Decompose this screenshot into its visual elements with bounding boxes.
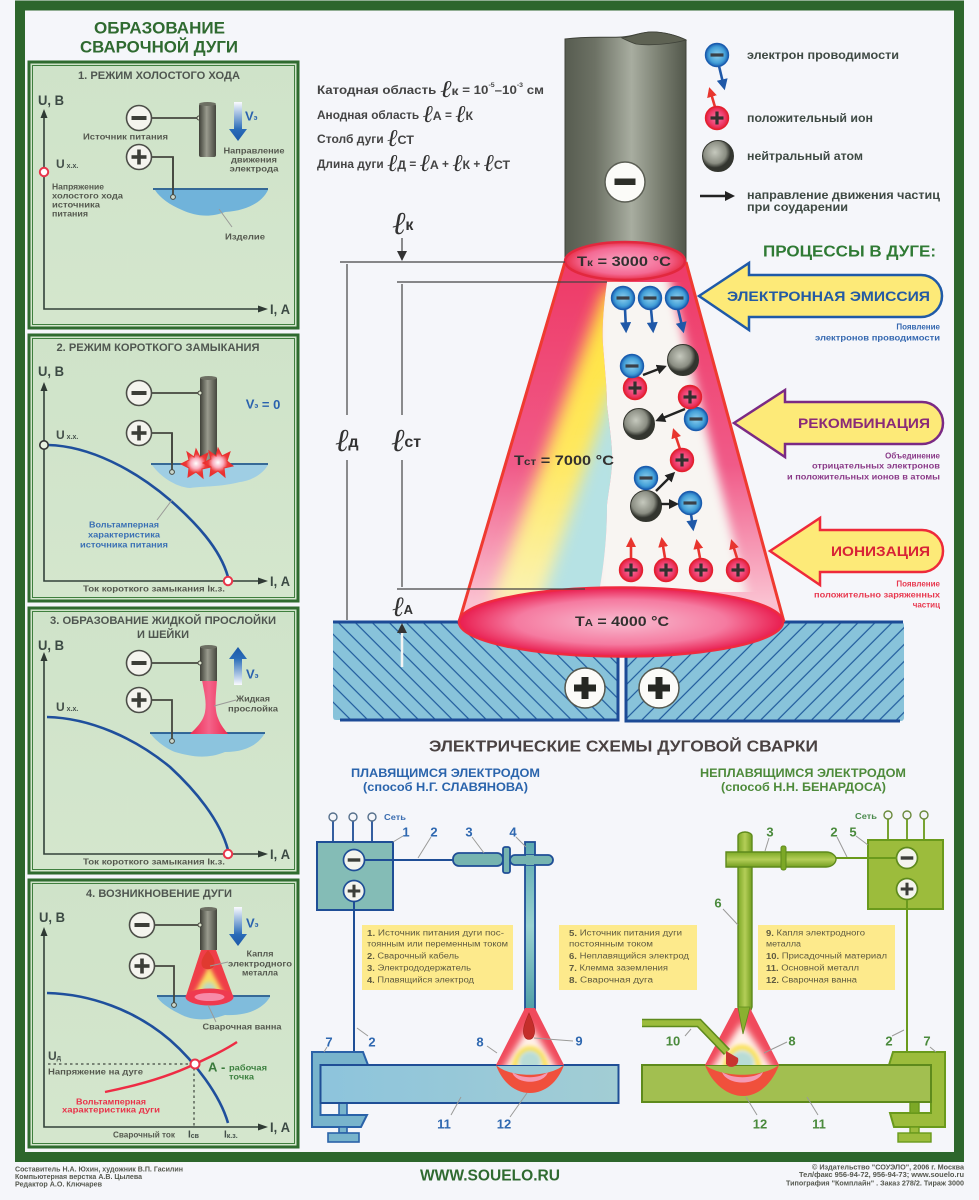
volt-ampere curve: panel 3: Ток короткого замыкания Iк.з. xyxy=(83,858,225,866)
caption: ionization: частиц xyxy=(913,600,940,610)
dimension label: arc length: д xyxy=(348,434,358,450)
welding current label xyxy=(113,1130,238,1140)
negative sign on electrode xyxy=(605,162,645,202)
caption: emission: Появление xyxy=(896,322,941,332)
footer: website: WWW.SOUELO.RU xyxy=(420,1168,560,1184)
label: liquid layer xyxy=(214,694,279,714)
legend box 2: 5. Источник питания дуги xyxy=(569,928,682,938)
open-circuit voltage point xyxy=(40,157,124,218)
workpiece xyxy=(153,157,268,242)
arrow: electrode feed panel 4: э xyxy=(255,922,259,928)
dimension label: anode length: А xyxy=(404,602,414,616)
volt-ampere curve: panel 2: Ток короткого замыкания Iк.з. xyxy=(83,584,225,594)
numbered leaders right: 2 xyxy=(885,1034,893,1048)
formulas: К xyxy=(463,158,471,172)
filler wire xyxy=(642,1023,738,1067)
footer: publisher xyxy=(786,1164,964,1188)
axes: panel 3: I, А xyxy=(270,846,290,862)
open-circuit voltage point: источника xyxy=(52,200,101,210)
power source box left xyxy=(317,812,406,910)
plus terminal left xyxy=(565,668,605,708)
legend xyxy=(700,44,941,214)
workpiece and clamp left xyxy=(312,1052,618,1142)
arrow: electrode feed panel 4: V xyxy=(246,916,255,930)
numbered leaders right: 6 xyxy=(714,896,722,910)
panel 1: open circuit mode xyxy=(29,62,298,328)
cables right xyxy=(835,858,907,1053)
labels: droplet and weld pool: Сварочная ванна xyxy=(202,1022,282,1032)
arc right xyxy=(705,1006,779,1096)
welding current label: I xyxy=(224,1130,227,1140)
open-circuit voltage point: х.х. xyxy=(67,162,78,170)
formulas: ℓ xyxy=(420,151,430,177)
electrode with arc and droplet xyxy=(186,907,234,1006)
footer: publisher: © Издательство "СОУЭЛО", 2006 г. Москва xyxy=(812,1164,964,1172)
legend box 1: 3. Электрододержатель xyxy=(367,964,471,972)
caption: ionization xyxy=(814,580,941,610)
operating point A: Напряжение на дуге xyxy=(48,1068,144,1076)
formulas: –10 xyxy=(495,85,517,97)
workpiece: Изделие xyxy=(225,232,266,242)
panel 4: arc ignition xyxy=(29,880,298,1147)
subheading: consumable electrode: (способ Н.Г. СЛАВЯНОВА) xyxy=(363,780,528,794)
open-circuit voltage point: холостого хода xyxy=(52,192,124,200)
volt-ampere curve: panel 2: Вольтамперная xyxy=(89,520,159,530)
right circuit diagram xyxy=(642,811,945,1142)
subheading: consumable electrode: ПЛАВЯЩИМСЯ ЭЛЕКТРОДОМ xyxy=(351,766,540,780)
heading: welding circuits: ЭЛЕКТРИЧЕСКИЕ СХЕМЫ ДУГОВОЙ СВАРКИ xyxy=(429,738,818,756)
numbered leaders left: 4 xyxy=(509,824,517,840)
numbered leaders right: 11 xyxy=(812,1116,826,1132)
power source box right: Сеть xyxy=(855,811,877,821)
terminals and electrode: panel 2 xyxy=(126,376,280,472)
volt-ampere curve: panel 3: U xyxy=(56,700,65,714)
legend box 1: 1. Источник питания дуги пос- xyxy=(367,928,504,938)
heading: panel 3 xyxy=(50,614,276,641)
legend: electron: электрон проводимости xyxy=(747,48,899,62)
subheading: non-consumable electrode: (способ Н.Н. БЕНАРДОСА) xyxy=(721,780,886,794)
title xyxy=(80,18,238,56)
formulas: Д xyxy=(397,158,407,172)
title: СВАРОЧНОЙ ДУГИ xyxy=(80,38,238,56)
formulas: СТ xyxy=(494,158,511,172)
panel 3: liquid layer and neck xyxy=(29,608,298,873)
arc curve caption: характеристика дуги xyxy=(62,1106,160,1114)
anode spot: Т xyxy=(575,613,584,629)
axes: panel 2 xyxy=(38,363,290,589)
formulas xyxy=(317,77,544,177)
anode spot: А xyxy=(585,618,593,628)
caption: emission xyxy=(815,322,941,342)
axes: panel 2: I, А xyxy=(270,573,290,589)
heading: panel 4: 4. ВОЗНИКНОВЕНИЕ ДУГИ xyxy=(86,888,232,900)
labels: droplet and weld pool: металла xyxy=(242,968,279,978)
formulas: ℓ xyxy=(484,151,494,177)
formulas: ℓ xyxy=(387,151,397,177)
volt-ampere curve: panel 2 xyxy=(40,428,232,594)
power source terminals xyxy=(83,106,201,197)
formulas: Анодная область xyxy=(317,110,416,122)
formulas: см xyxy=(523,85,544,97)
axes: panel 1: I, А xyxy=(270,301,290,317)
positive ions row xyxy=(620,540,750,582)
emission electrons xyxy=(612,286,688,330)
dimension label: column length: ст xyxy=(404,434,421,450)
title: ОБРАЗОВАНИЕ xyxy=(94,18,225,38)
terminals and electrode: panel 2: = 0 xyxy=(258,396,280,412)
legend box 3: 11. Основной металл xyxy=(766,964,859,972)
workpiece: panel 3 xyxy=(150,733,265,757)
arrow: electrode retracts xyxy=(229,647,259,685)
heading: panel 3: 3. ОБРАЗОВАНИЕ ЖИДКОЙ ПРОСЛОЙКИ xyxy=(50,614,276,627)
operating point A: д xyxy=(57,1054,62,1062)
formulas: = 10 xyxy=(462,85,484,97)
caption: emission: электронов проводимости xyxy=(815,334,940,342)
axes: panel 3: U, В xyxy=(38,637,64,653)
arrow: electrode feed: э xyxy=(254,114,258,122)
legend box 1: 4. Плавящийся электрод xyxy=(367,976,474,984)
panel 2: short circuit mode xyxy=(29,335,298,601)
formulas: = xyxy=(445,110,452,122)
open-circuit voltage point: Напряжение xyxy=(52,182,105,192)
footer: publisher: Типография "Комплайн" . Заказ 278/2. Тираж 3000 xyxy=(786,1180,964,1188)
cables left xyxy=(354,860,454,1053)
numbered leaders left: 11 xyxy=(437,1116,451,1132)
arc left xyxy=(496,1008,564,1093)
operating point A: U xyxy=(48,1049,57,1063)
column temperature: Т xyxy=(514,452,523,468)
operating point A xyxy=(48,1049,267,1127)
label: liquid layer: Жидкая xyxy=(235,694,270,704)
arrow: electrode feed: электрода xyxy=(230,164,279,174)
heading: panel 2: 2. РЕЖИМ КОРОТКОГО ЗАМЫКАНИЯ xyxy=(56,342,260,354)
volt-ampere curve: panel 2: источника питания xyxy=(80,540,168,550)
plus terminal right xyxy=(639,668,679,708)
power source box right xyxy=(855,811,943,909)
formulas: Катодная область xyxy=(317,85,420,97)
axes: panel 4: U, В xyxy=(39,909,65,925)
welding current label: I xyxy=(188,1130,191,1140)
dimension label: cathode length: к xyxy=(405,216,414,234)
footer: credits: Составитель Н.А. Юхин, художник В.П. Гасилин xyxy=(15,1166,183,1174)
labels: droplet and weld pool xyxy=(202,950,292,1032)
formulas: к xyxy=(452,84,460,98)
power source box left: Сеть xyxy=(384,812,406,822)
numbered leaders right xyxy=(666,824,936,1132)
formulas: СТ xyxy=(398,133,415,147)
subheading: consumable electrode xyxy=(351,766,540,794)
dimension lines xyxy=(340,238,607,667)
left circuit diagram xyxy=(312,812,618,1142)
anode spot: = 4000 °С xyxy=(593,613,669,629)
formulas: + xyxy=(442,159,449,171)
arrow: electrode feed: движения xyxy=(231,156,277,164)
axes: panel 3 xyxy=(38,637,290,862)
formulas: = xyxy=(409,159,416,171)
numbered leaders left xyxy=(324,824,583,1132)
numbered leaders left: 9 xyxy=(575,1034,583,1048)
open-circuit voltage point: питания xyxy=(52,210,88,218)
volt-ampere curve: panel 2: U xyxy=(56,428,65,442)
axes: panel 2: U, В xyxy=(38,363,64,379)
axes: panel 4: I, А xyxy=(270,1119,290,1135)
torch and tungsten electrode xyxy=(726,832,836,1034)
terminals and electrode: panel 2: э xyxy=(254,402,258,410)
legend box 3: металла xyxy=(766,940,802,948)
caption: ionization: положительно заряженных xyxy=(814,590,941,600)
numbered leaders left: 3 xyxy=(465,824,473,840)
dimension label: cathode length: ℓ xyxy=(392,205,406,241)
operating point A: А - xyxy=(208,1060,225,1074)
legend box 2: 6. Неплавящийся электрод xyxy=(569,952,689,960)
terminals: panel 4 xyxy=(130,912,202,1007)
electrode with liquid neck xyxy=(190,645,228,734)
labels: droplet and weld pool: электродного xyxy=(228,960,292,968)
legend box 2: постоянным током xyxy=(569,940,653,948)
numbered leaders left: 2 xyxy=(368,1034,376,1050)
caption: recombination xyxy=(787,452,941,482)
legend: collision arrow xyxy=(700,188,941,214)
formulas: А xyxy=(433,109,442,123)
legend: collision arrow: направление движения частиц xyxy=(747,188,941,202)
arrow: electron emission: ЭЛЕКТРОННАЯ ЭМИССИЯ xyxy=(727,288,930,304)
welding current label: Сварочный ток xyxy=(113,1130,176,1140)
arc curve caption: Вольтамперная xyxy=(76,1098,146,1106)
dimension label: arc length: ℓ xyxy=(335,422,349,458)
legend box 3: 10. Присадочный материал xyxy=(766,952,887,960)
legend box 2: 8. Сварочная дуга xyxy=(569,976,654,984)
arrow: ionization: ИОНИЗАЦИЯ xyxy=(831,543,930,559)
legend: electron xyxy=(706,44,899,87)
numbered leaders right: 7 xyxy=(923,1034,931,1048)
formulas: ℓ xyxy=(440,77,452,103)
arrow: electron emission xyxy=(699,263,942,342)
subheading: non-consumable electrode xyxy=(700,766,906,794)
footer: credits: Редактор А.О. Ключарев xyxy=(15,1182,103,1188)
dimension label: anode length: ℓ xyxy=(392,592,404,622)
arc characteristic curve xyxy=(105,1042,237,1092)
recombination group 2 xyxy=(624,386,708,440)
arc curve caption xyxy=(62,1098,160,1114)
arrow: recombination: РЕКОМБИНАЦИЯ xyxy=(798,415,930,431)
footer: credits xyxy=(15,1166,183,1188)
legend: ion: положительный ион xyxy=(747,111,873,125)
formulas: ℓ xyxy=(387,126,398,152)
cathode spot: Т xyxy=(577,253,586,269)
workpiece with short-circuit sparks xyxy=(151,433,268,488)
formulas: ℓ xyxy=(455,102,465,128)
dimension label: column length: ℓ xyxy=(391,422,405,458)
formulas: ℓ xyxy=(452,151,463,177)
volt-ampere curve: panel 2: х.х. xyxy=(67,434,78,440)
caption: recombination: и положительных ионов в атомы xyxy=(787,472,940,482)
numbered leaders right: 12 xyxy=(753,1116,767,1132)
terminals and electrode: panel 2: V xyxy=(246,396,254,412)
electrode holder and consumable electrode xyxy=(453,842,553,1010)
cathode spot: = 3000 °С xyxy=(593,253,671,269)
volt-ampere curve: panel 3 xyxy=(47,700,232,866)
formulas: Столб дуги xyxy=(317,134,381,146)
arrow: electrode feed panel 4 xyxy=(229,907,259,946)
caption: ionization: Появление xyxy=(896,580,941,588)
operating point A: точка xyxy=(229,1072,255,1082)
numbered leaders left: 1 xyxy=(402,824,410,840)
legend: atom: нейтральный атом xyxy=(747,149,863,163)
column temperature: = 7000 °С xyxy=(536,452,614,468)
numbered leaders right: 8 xyxy=(788,1034,796,1048)
arrow: recombination xyxy=(734,390,943,482)
labels: droplet and weld pool: Капля xyxy=(246,950,274,958)
terminals: panel 3 xyxy=(126,650,202,743)
anode spot xyxy=(459,588,783,656)
label: liquid layer: прослойка xyxy=(228,704,279,714)
numbered leaders right: 5 xyxy=(849,824,857,840)
formulas: ℓ xyxy=(422,102,433,128)
arc cone xyxy=(450,242,800,656)
legend: ion xyxy=(706,90,873,130)
legend box 1: 2. Сварочный кабель xyxy=(367,952,459,960)
numbered leaders right: 3 xyxy=(766,824,774,840)
arrow: ionization xyxy=(770,518,943,610)
operating point A: рабочая xyxy=(229,1064,267,1072)
cathode spot xyxy=(565,242,685,280)
ionization collision xyxy=(630,431,702,528)
numbered leaders left: 7 xyxy=(325,1034,333,1050)
numbered leaders left: 2 xyxy=(430,824,438,840)
welding current label: св xyxy=(191,1132,200,1140)
legend: collision arrow: при соударении xyxy=(747,200,848,214)
recombination group 1 xyxy=(620,344,698,400)
legend box 3: 9. Капля электродного xyxy=(766,928,866,938)
legend box 3: 12. Сварочная ванна xyxy=(766,976,858,984)
formulas: А xyxy=(430,158,439,172)
legend box 3 xyxy=(758,925,895,990)
formulas: + xyxy=(473,159,480,171)
legend box 1 xyxy=(362,925,513,990)
axes: panel 1: U, В xyxy=(38,92,64,108)
workpiece and clamp right xyxy=(642,1052,945,1142)
arrow: electrode feed: Направление xyxy=(224,146,285,156)
caption: recombination: Объединение xyxy=(885,452,941,460)
column temperature: ст xyxy=(524,456,536,468)
heading: panel 3: И ШЕЙКИ xyxy=(137,628,189,641)
heading: arc processes: ПРОЦЕССЫ В ДУГЕ: xyxy=(763,244,936,260)
formulas: -3 xyxy=(517,83,524,89)
numbered leaders right: 2 xyxy=(830,824,838,840)
arrow: electrode retracts: V xyxy=(246,666,255,682)
formulas: К xyxy=(465,109,474,123)
caption: recombination: отрицательных электронов xyxy=(812,462,940,470)
footer: credits: Компьютерная верстка А.В. Цылева xyxy=(15,1174,142,1181)
numbered leaders left: 12 xyxy=(497,1116,511,1132)
formulas: -5 xyxy=(488,83,495,89)
legend box 1: тоянным или переменным током xyxy=(367,940,508,948)
subheading: non-consumable electrode: НЕПЛАВЯЩИМСЯ ЭЛЕКТРОДОМ xyxy=(700,766,906,780)
power source curve xyxy=(47,993,228,1123)
heading: panel 1: 1. РЕЖИМ ХОЛОСТОГО ХОДА xyxy=(78,70,240,82)
legend box 2 xyxy=(559,925,697,990)
arrow: electrode feed: V xyxy=(245,108,254,124)
workpiece plates xyxy=(333,622,904,721)
arrow: electrode retracts: э xyxy=(255,672,259,680)
formulas: Длина дуги xyxy=(317,159,382,171)
power source terminals: Источник питания xyxy=(83,132,168,142)
legend: atom xyxy=(702,140,863,172)
axes: panel 1 xyxy=(38,92,290,317)
main electrode xyxy=(565,32,686,262)
axes: panel 4 xyxy=(39,909,290,1135)
welding current label: к.з. xyxy=(227,1132,238,1140)
electrode xyxy=(199,102,216,157)
volt-ampere curve: panel 3: х.х. xyxy=(67,706,78,712)
workpiece: panel 4 xyxy=(157,996,270,1019)
cathode spot: к xyxy=(587,258,594,268)
numbered leaders left: 8 xyxy=(476,1034,484,1050)
arrow: electrode feed xyxy=(224,102,285,174)
legend box 2: 7. Клемма заземления xyxy=(569,964,668,972)
volt-ampere curve: panel 2: характеристика xyxy=(88,530,161,540)
open-circuit voltage point: U xyxy=(56,157,65,171)
numbered leaders right: 10 xyxy=(666,1034,680,1048)
footer: publisher: Тел/факс 956-94-72, 956-94-73; www.souelo.ru xyxy=(799,1172,964,1179)
